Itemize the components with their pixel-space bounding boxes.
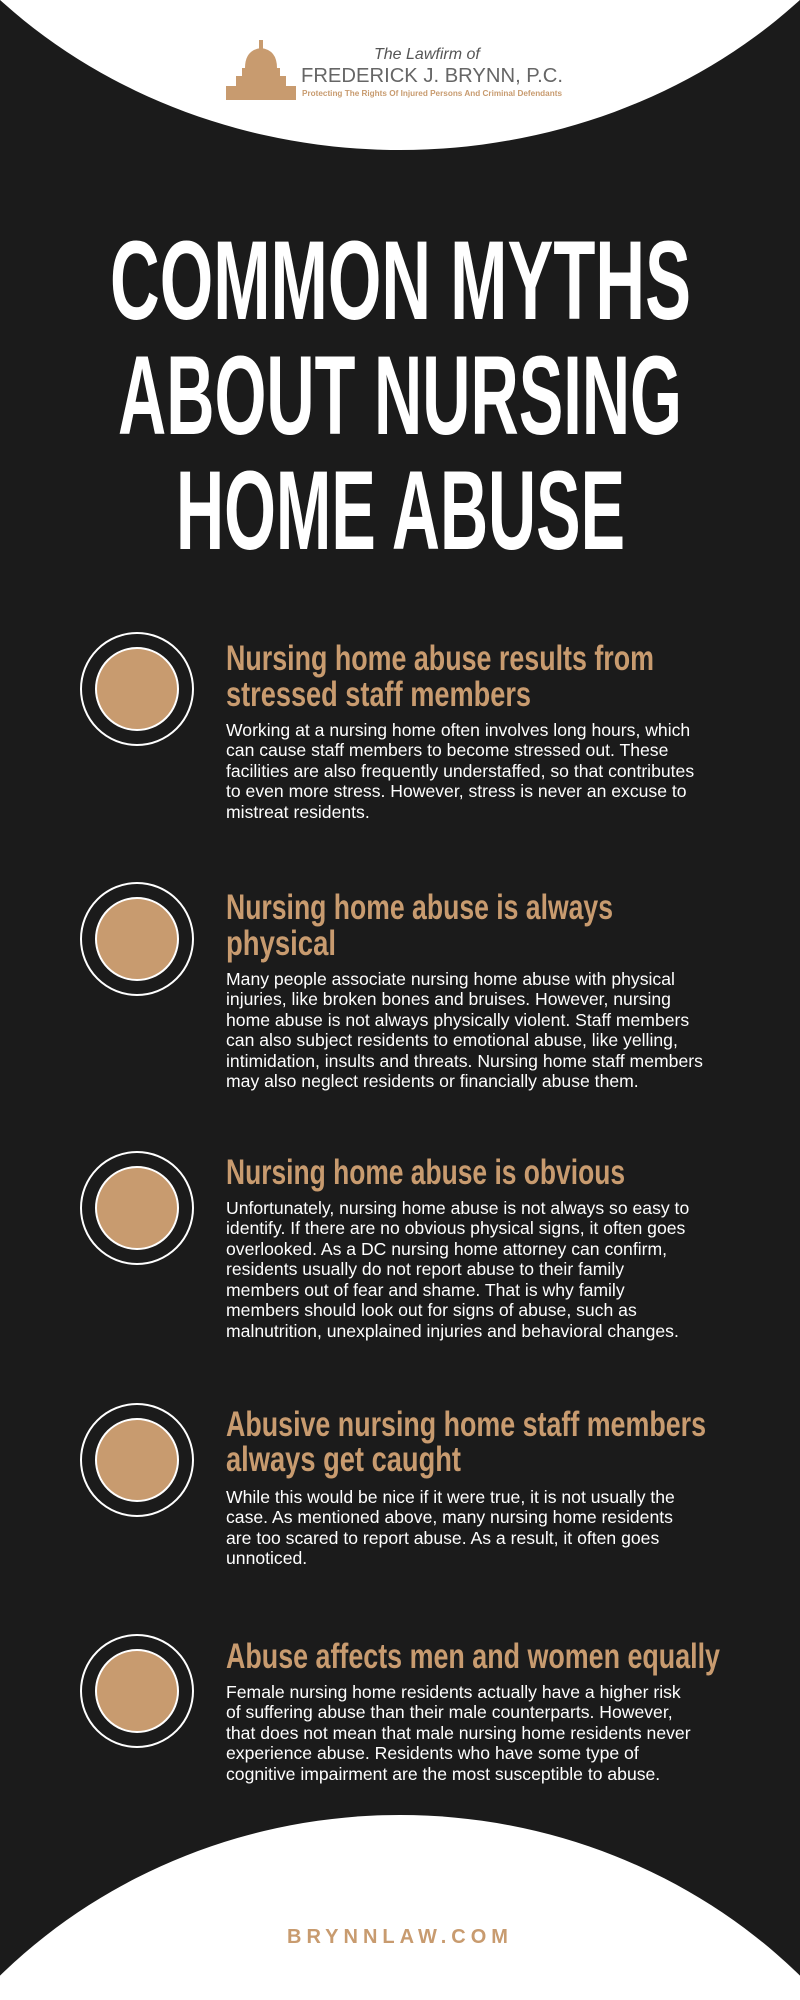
icon: circle 4 — [81, 1404, 193, 1516]
heading 1 — [226, 639, 654, 714]
heading 1: stressed staff members — [226, 675, 531, 714]
text block 3: overlooked. As a DC nursing home attorney can confirm, — [226, 1239, 667, 1259]
text block 2: injuries, like broken bones and bruises. However, nursing — [226, 989, 671, 1009]
panel: myth 3 — [81, 1152, 689, 1341]
text block 1: facilities are also frequently understaffed, so that contributes — [226, 761, 694, 781]
heading 3: Nursing home abuse is obvious — [226, 1153, 625, 1192]
panel: myth 2 — [81, 883, 703, 1091]
icon: circle 5 — [81, 1635, 193, 1747]
text block 5: Female nursing home residents actually have a higher risk — [226, 1682, 681, 1702]
text block 2: Many people associate nursing home abuse with physical — [226, 969, 675, 989]
text block 4: case. As mentioned above, many nursing home residents — [226, 1507, 673, 1527]
text block 4 — [226, 1487, 675, 1568]
text block 3: residents usually do not report abuse to their family — [226, 1259, 624, 1279]
text block 3: identify. If there are no obvious physical signs, it often goes — [226, 1218, 686, 1238]
text block 4: unnoticed. — [226, 1548, 307, 1568]
panel: myth 4 — [81, 1404, 706, 1568]
icon: circle 3 — [81, 1152, 193, 1264]
logo — [226, 40, 563, 100]
logo: FREDERICK J. BRYNN, P.C. — [301, 65, 563, 87]
logo: Protecting The Rights Of Injured Persons And Criminal Defendants — [302, 89, 563, 98]
heading 2: Nursing home abuse is always — [226, 888, 613, 927]
text block 1 — [226, 720, 694, 822]
text block 1: Working at a nursing home often involves long hours, which — [226, 720, 690, 740]
text block 3: malnutrition, unexplained injuries and behavioral changes. — [226, 1321, 679, 1341]
text block 3: Unfortunately, nursing home abuse is not always so easy to — [226, 1198, 689, 1218]
heading 2 — [226, 888, 613, 963]
text block 5: cognitive impairment are the most susceptible to abuse. — [226, 1764, 660, 1784]
text block 2: home abuse is not always physically violent. Staff members — [226, 1010, 689, 1030]
text block 1: mistreat residents. — [226, 802, 370, 822]
panel: myth 1 — [81, 633, 694, 822]
footer url: BRYNNLAW.COM — [287, 1926, 513, 1948]
icon: capitol — [226, 40, 296, 100]
title — [110, 218, 691, 573]
text block 1: to even more stress. However, stress is never an excuse to — [226, 781, 687, 801]
text block 2 — [226, 969, 703, 1091]
icon: circle 1 — [81, 633, 193, 745]
heading 4 — [226, 1405, 706, 1479]
text block 5 — [226, 1682, 691, 1784]
text block 2: can also subject residents to emotional abuse, like yelling, — [226, 1030, 678, 1050]
text block 4: While this would be nice if it were true, it is not usually the — [226, 1487, 675, 1507]
text block 5: experience abuse. Residents who have some type of — [226, 1743, 639, 1763]
text block 5: that does not mean that male nursing home residents never — [226, 1723, 691, 1743]
top white arc — [0, 0, 800, 150]
logo: The Lawfirm of — [374, 46, 481, 63]
text block 1: can cause staff members to become stressed out. These — [226, 740, 668, 760]
text block 5: of suffering abuse than their male counterparts. However, — [226, 1702, 673, 1722]
text block 2: intimidation, insults and threats. Nursing home staff members — [226, 1051, 703, 1071]
bottom white arc — [0, 1815, 800, 2000]
panel: myth 5 — [81, 1635, 720, 1784]
text block 3: members out of fear and shame. That is why family — [226, 1280, 625, 1300]
text block 3 — [226, 1198, 689, 1341]
text block 2: may also neglect residents or financially abuse them. — [226, 1071, 639, 1091]
icon: circle 2 — [81, 883, 193, 995]
heading 1: Nursing home abuse results from — [226, 639, 654, 678]
text block 4: are too scared to report abuse. As a result, it often goes — [226, 1528, 659, 1548]
text block 3: members should look out for signs of abuse, such as — [226, 1300, 637, 1320]
heading 2: physical — [226, 924, 336, 963]
heading 4: always get caught — [226, 1440, 461, 1479]
